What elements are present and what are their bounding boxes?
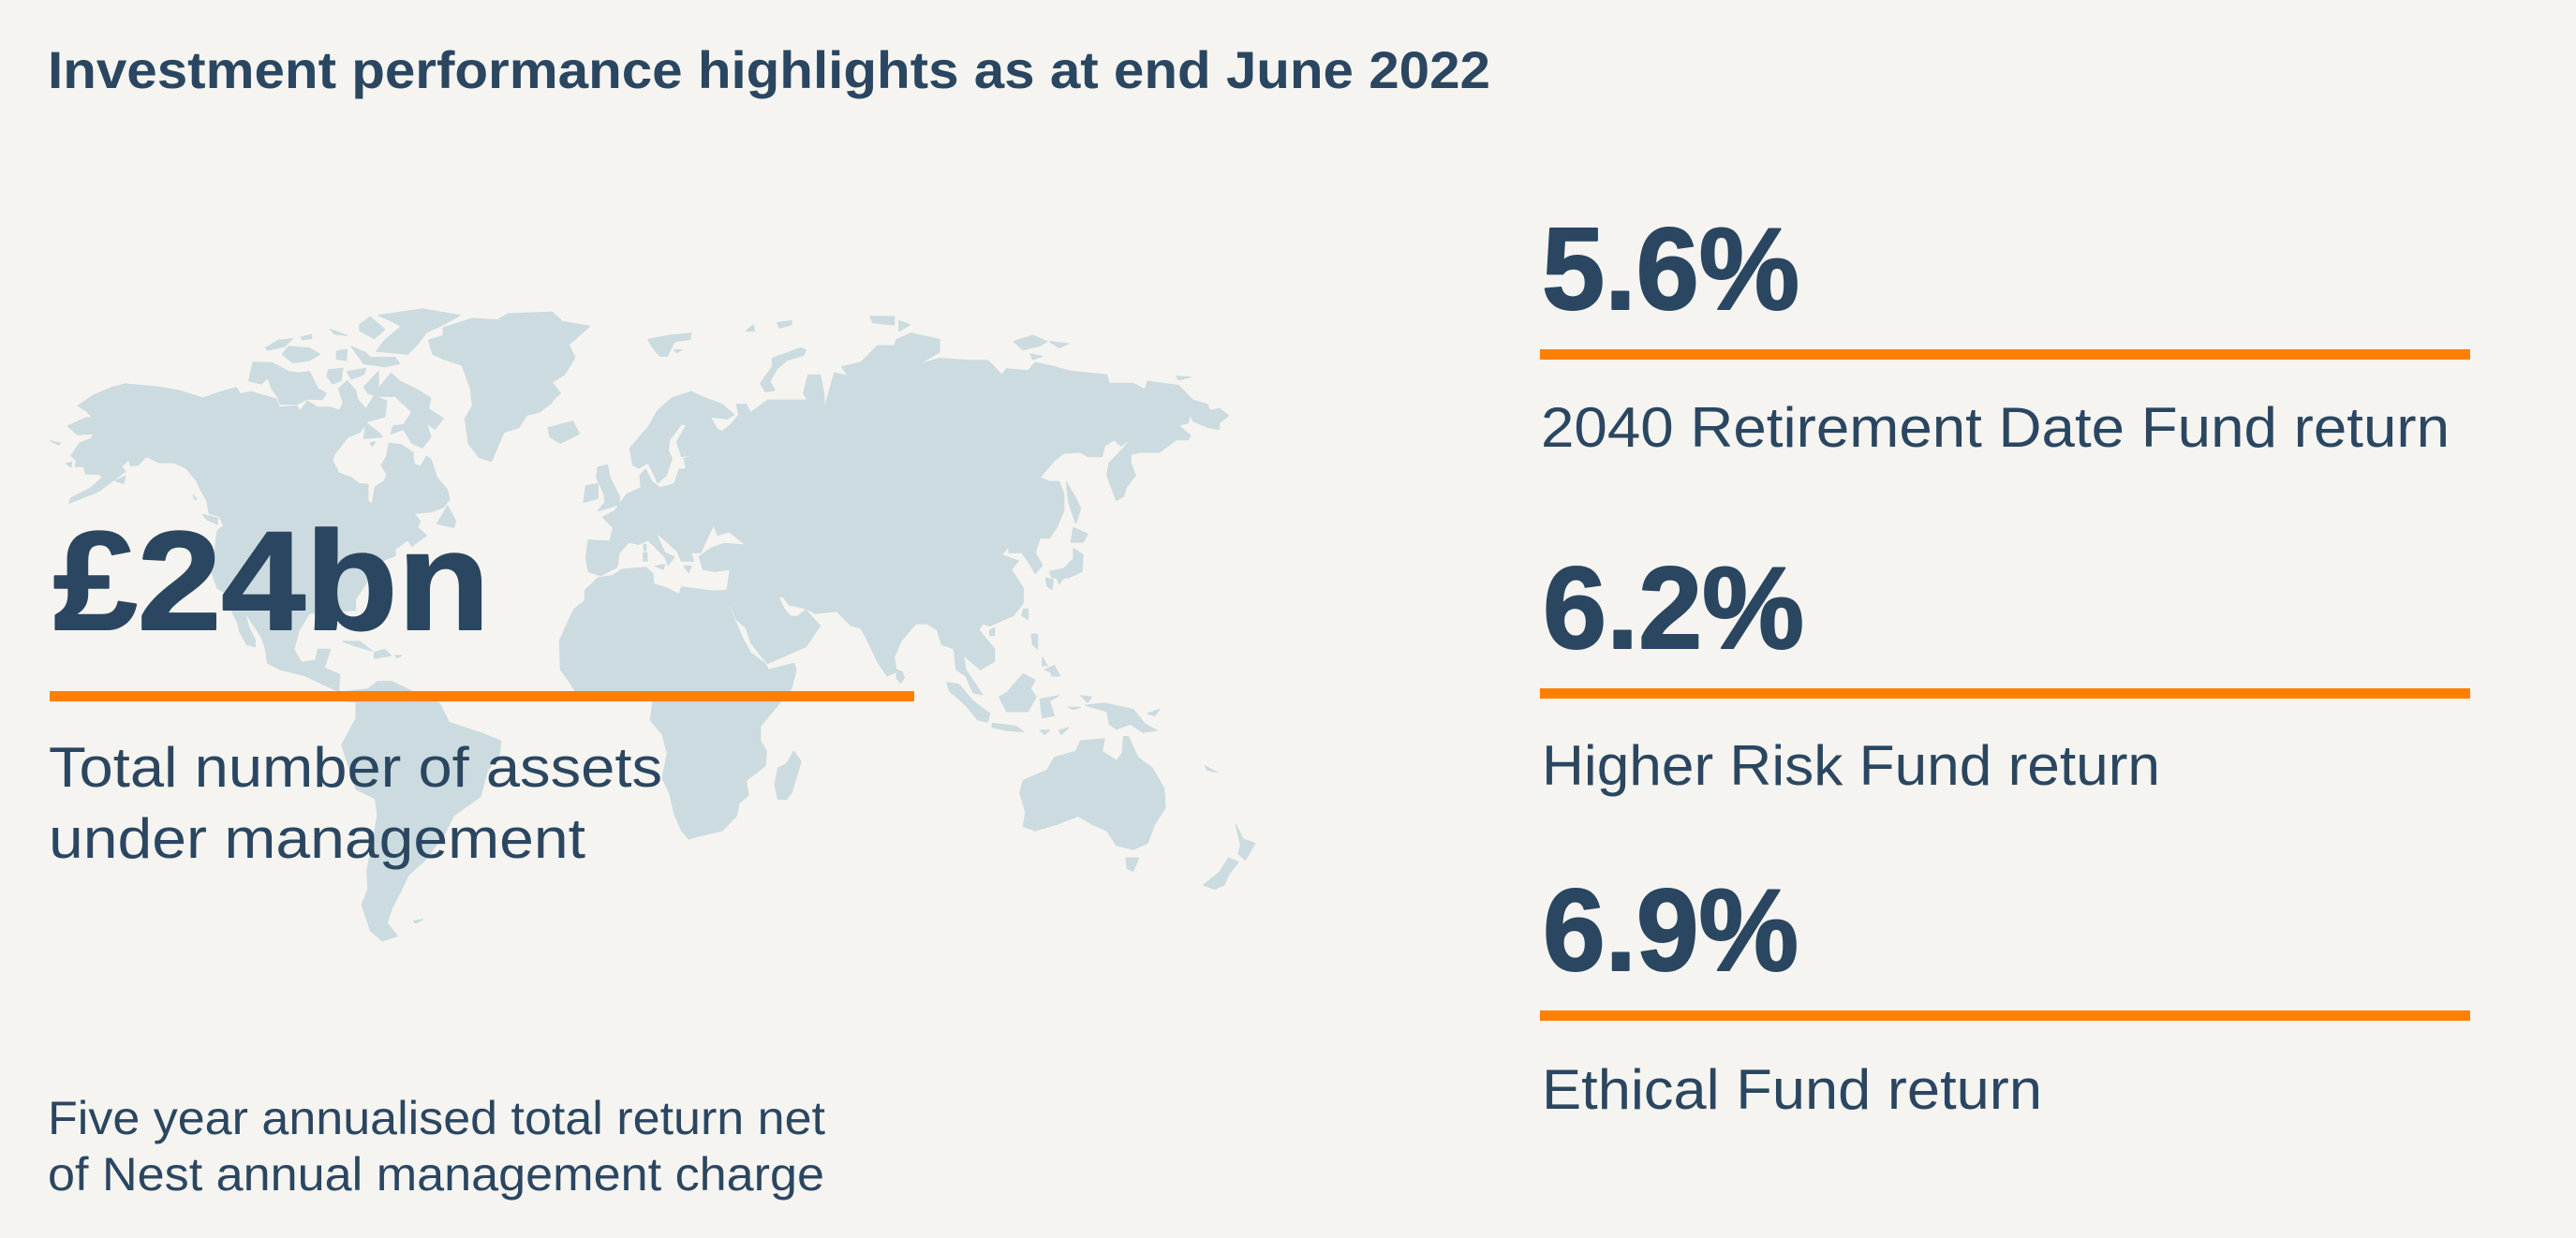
orange rule xyxy=(50,691,914,701)
stat: Ethical Fund xyxy=(1540,866,2470,1121)
value 6.9%: 6.9% xyxy=(1543,866,1799,995)
big number: £24bn: £24bn xyxy=(53,502,490,659)
value 5.6%: 5.6% xyxy=(1542,205,1799,334)
label: total assets: Total number of assets xyxy=(49,736,662,799)
panel: assets under management xyxy=(49,502,914,870)
map: Africa, Europe and Asia with islands xyxy=(559,317,1255,890)
title: Investment performance highlights as at end June 2022 xyxy=(48,40,1490,99)
footnote xyxy=(48,1092,825,1201)
label: 2040 Retirement Date Fund return xyxy=(1541,396,2450,459)
stat: 2040 Retirement Date Fund xyxy=(1540,205,2470,459)
map: South America xyxy=(334,682,501,941)
orange rule xyxy=(1540,688,2470,699)
label: total assets xyxy=(49,736,662,870)
value 6.2%: 6.2% xyxy=(1543,544,1804,673)
footnote: of Nest annual management charge xyxy=(48,1148,824,1201)
label: Ethical Fund return xyxy=(1542,1058,2042,1121)
map: North America and Arctic islands xyxy=(51,309,589,691)
label: total assets: under management xyxy=(49,807,585,870)
footnote: Five year annualised total return net xyxy=(48,1092,825,1144)
stat: Higher Risk Fund xyxy=(1540,544,2470,797)
world map xyxy=(51,309,1255,941)
label: Higher Risk Fund return xyxy=(1542,734,2160,797)
orange rule xyxy=(1540,349,2470,360)
orange rule xyxy=(1540,1010,2470,1021)
